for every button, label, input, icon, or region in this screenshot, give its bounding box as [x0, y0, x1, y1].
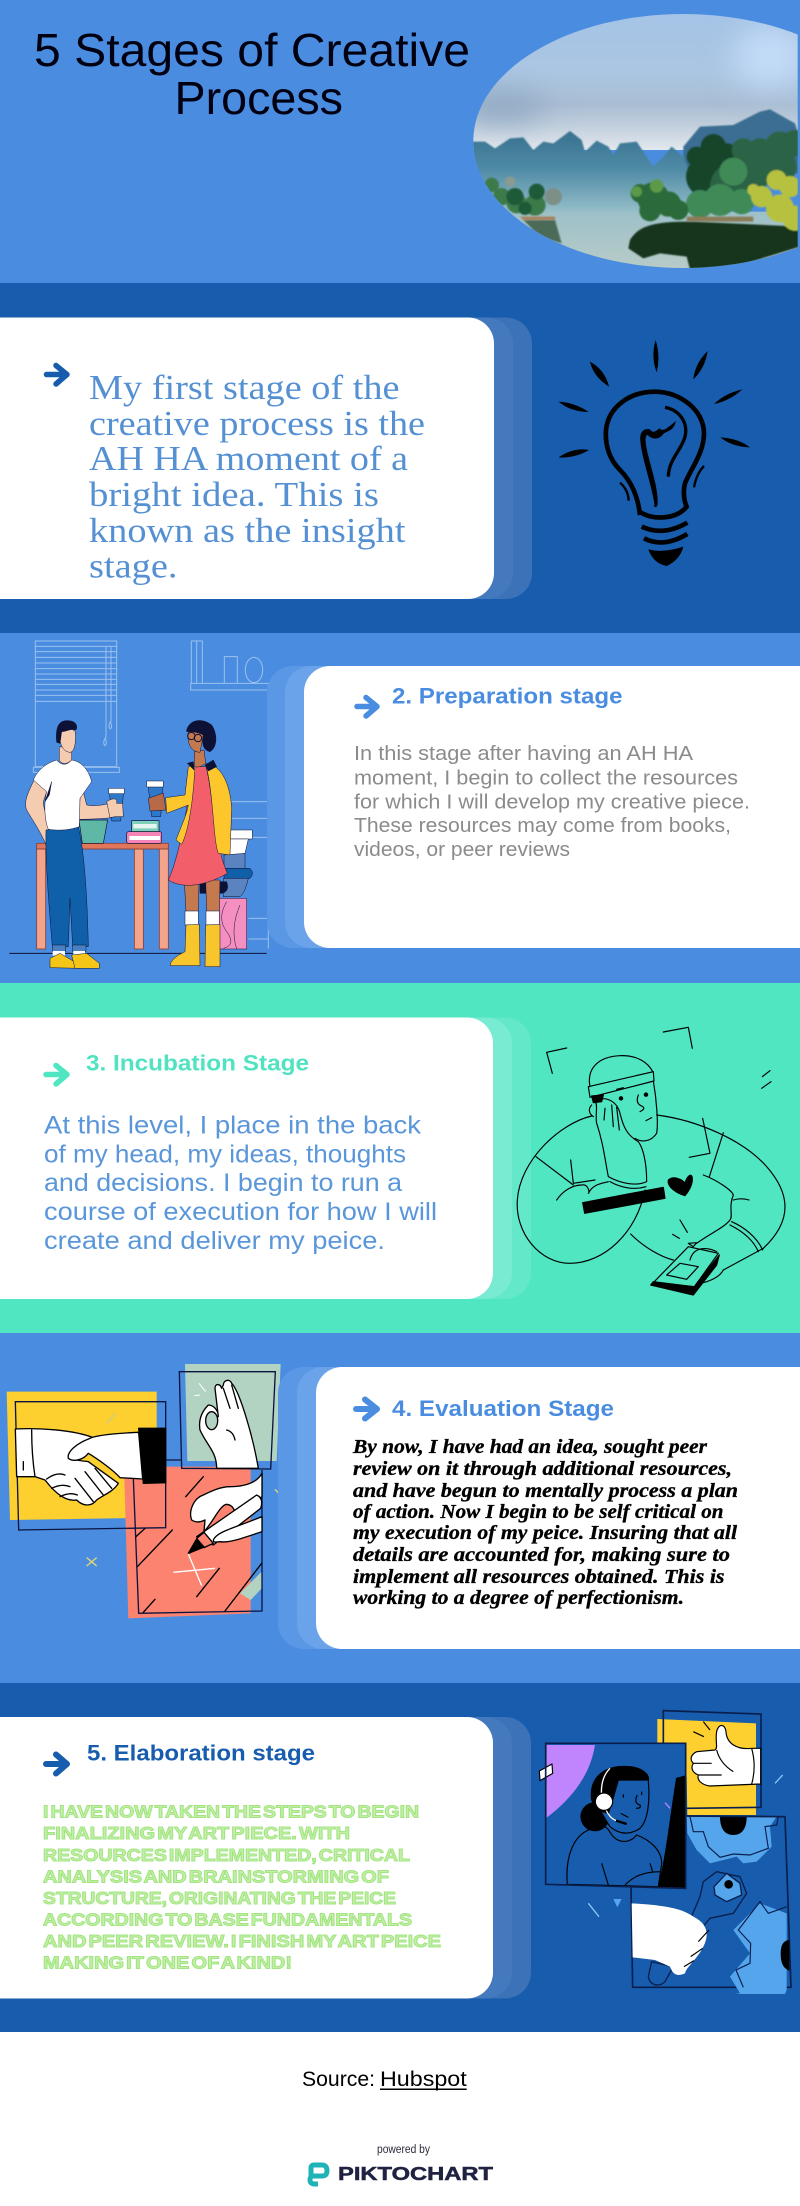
- stage 4 text: [352, 1436, 738, 1609]
- illustration: handshake, OK sign and pen: [7, 1364, 301, 1618]
- card shadow layers: [0, 1018, 531, 1299]
- stage 2 text: In this stage after having an AH HA: [354, 743, 694, 765]
- powered by label: powered by: [377, 2144, 430, 2156]
- panel: stage 5: [0, 1683, 800, 2032]
- white card: [0, 318, 494, 599]
- photo right edge: [798, 0, 800, 280]
- stage 1 text: stage.: [89, 546, 178, 586]
- stage 5 text: MAKING IT ONE OF A KIND!: [43, 1952, 292, 1972]
- title: Process: [174, 72, 343, 124]
- logo mark: [310, 2165, 327, 2184]
- white card: [304, 666, 800, 948]
- stage 5 text: ANALYSIS AND BRAINSTORMING OF: [43, 1866, 389, 1886]
- stage 5 text: ACCORDING TO BASE FUNDAMENTALS: [43, 1910, 412, 1930]
- stage 4 text: and have begun to mentally process a plan: [353, 1480, 738, 1502]
- white card: [0, 1717, 493, 1998]
- laptop and books: [79, 820, 162, 843]
- stage 4 text: working to a degree of perfectionism.: [353, 1587, 684, 1609]
- powered by Piktochart logo: [310, 2144, 493, 2184]
- card shadow layers: [0, 318, 532, 599]
- stage 3 text: of my head, my ideas, thoughts: [44, 1141, 406, 1169]
- panel: stage 2: [0, 633, 800, 983]
- stage 5 text: RESOURCES IMPLEMENTED, CRITICAL: [43, 1845, 410, 1865]
- arrow: [46, 1066, 67, 1084]
- stage 4 text: of action. Now I begin to be self critical on: [353, 1501, 724, 1523]
- floor line: [9, 952, 267, 955]
- white card: [316, 1367, 800, 1649]
- section background: [0, 633, 800, 983]
- section background: [0, 983, 800, 1333]
- stage 2 text: for which I will develop my creative piece.: [354, 792, 750, 814]
- panel: stage 3: [0, 983, 800, 1333]
- heading: elaboration stage: 5. Elaboration stage: [87, 1740, 315, 1766]
- illustration: support agent, thumbs up, wrench and gears: [539, 1711, 791, 1994]
- stage 1 text: AH HA moment of a: [89, 439, 408, 478]
- stage 1 text: bright idea. This is: [89, 475, 379, 514]
- stage 2 text: [354, 743, 750, 861]
- water cooler and box: [219, 830, 252, 949]
- man: [26, 721, 124, 968]
- stage 4 text: By now, I have had an idea, sought peer: [352, 1436, 707, 1458]
- card shadow layers: [0, 1717, 531, 1998]
- arrow: [356, 1400, 377, 1418]
- stage 5 text: I HAVE NOW TAKEN THE STEPS TO BEGIN: [43, 1802, 419, 1822]
- illustration: two colleagues with coffee: [9, 641, 268, 968]
- stage 2 text: videos, or peer reviews: [354, 839, 570, 861]
- illustration: thoughtful person with phone: [517, 1027, 785, 1295]
- stage 5 text: AND PEER REVIEW. I FINISH MY ART PEICE: [43, 1931, 441, 1951]
- card shadow layers: [278, 1367, 800, 1649]
- heading: preparation stage: 2. Preparation stage: [392, 684, 622, 709]
- card shadow layers: [267, 666, 800, 948]
- panel: header: [0, 0, 800, 284]
- heading: incubation stage: 3. Incubation Stage: [86, 1051, 309, 1076]
- panel: stage 4: [0, 1333, 800, 1683]
- stage 2 text: These resources may come from books,: [354, 815, 731, 837]
- stage 3 text: create and deliver my peice.: [44, 1227, 385, 1255]
- source line: [302, 2068, 467, 2091]
- section background: [0, 1683, 800, 2032]
- panel: stage 1: [0, 283, 800, 633]
- table: [37, 843, 168, 949]
- title: [34, 24, 470, 124]
- photo: misty mountains and lake: [473, 14, 798, 268]
- stage 3 text: and decisions. I begin to run a: [44, 1169, 402, 1197]
- woman: [147, 720, 232, 967]
- stage 5 text: STRUCTURE, ORIGINATING THE PEICE: [43, 1888, 396, 1908]
- stage 3 text: At this level, I place in the back: [44, 1112, 422, 1140]
- stage 5 text: [43, 1802, 441, 1972]
- stage 5 text: FINALIZING MY ART PIECE. WITH: [43, 1823, 350, 1843]
- logo wordmark: PIKTOCHART: [338, 2164, 493, 2184]
- background room line art: [33, 641, 268, 948]
- title: 5 Stages of Creative: [34, 24, 470, 76]
- section background: [0, 283, 800, 633]
- stage 2 text: moment, I begin to collect the resources: [354, 768, 738, 790]
- stage 4 text: implement all resources obtained. This is: [353, 1566, 725, 1588]
- stage 3 text: [44, 1112, 437, 1255]
- arrow: [357, 698, 377, 716]
- stage 3 text: course of execution for how I will: [44, 1198, 437, 1226]
- heading: evaluation stage: 4. Evaluation Stage: [392, 1396, 614, 1421]
- white card: [0, 1018, 493, 1299]
- source line: Hubspot: [380, 2068, 467, 2091]
- section background: [0, 1333, 800, 1683]
- stage 1 text: known as the insight: [89, 511, 406, 550]
- stage 4 text: my execution of my peice. Insuring that all: [353, 1522, 737, 1544]
- icon: light bulb: [559, 340, 750, 566]
- stage 1 text: My first stage of the: [89, 368, 400, 407]
- header background: [0, 0, 800, 284]
- arrow: [46, 1754, 67, 1774]
- arrow: [46, 366, 67, 384]
- stage 1 text: [89, 368, 425, 586]
- stage 4 text: details are accounted for, making sure to: [353, 1544, 730, 1566]
- stage 1 text: creative process is the: [89, 404, 425, 443]
- stage 4 text: review on it through additional resources,: [353, 1458, 732, 1480]
- source line: Source:: [302, 2068, 375, 2091]
